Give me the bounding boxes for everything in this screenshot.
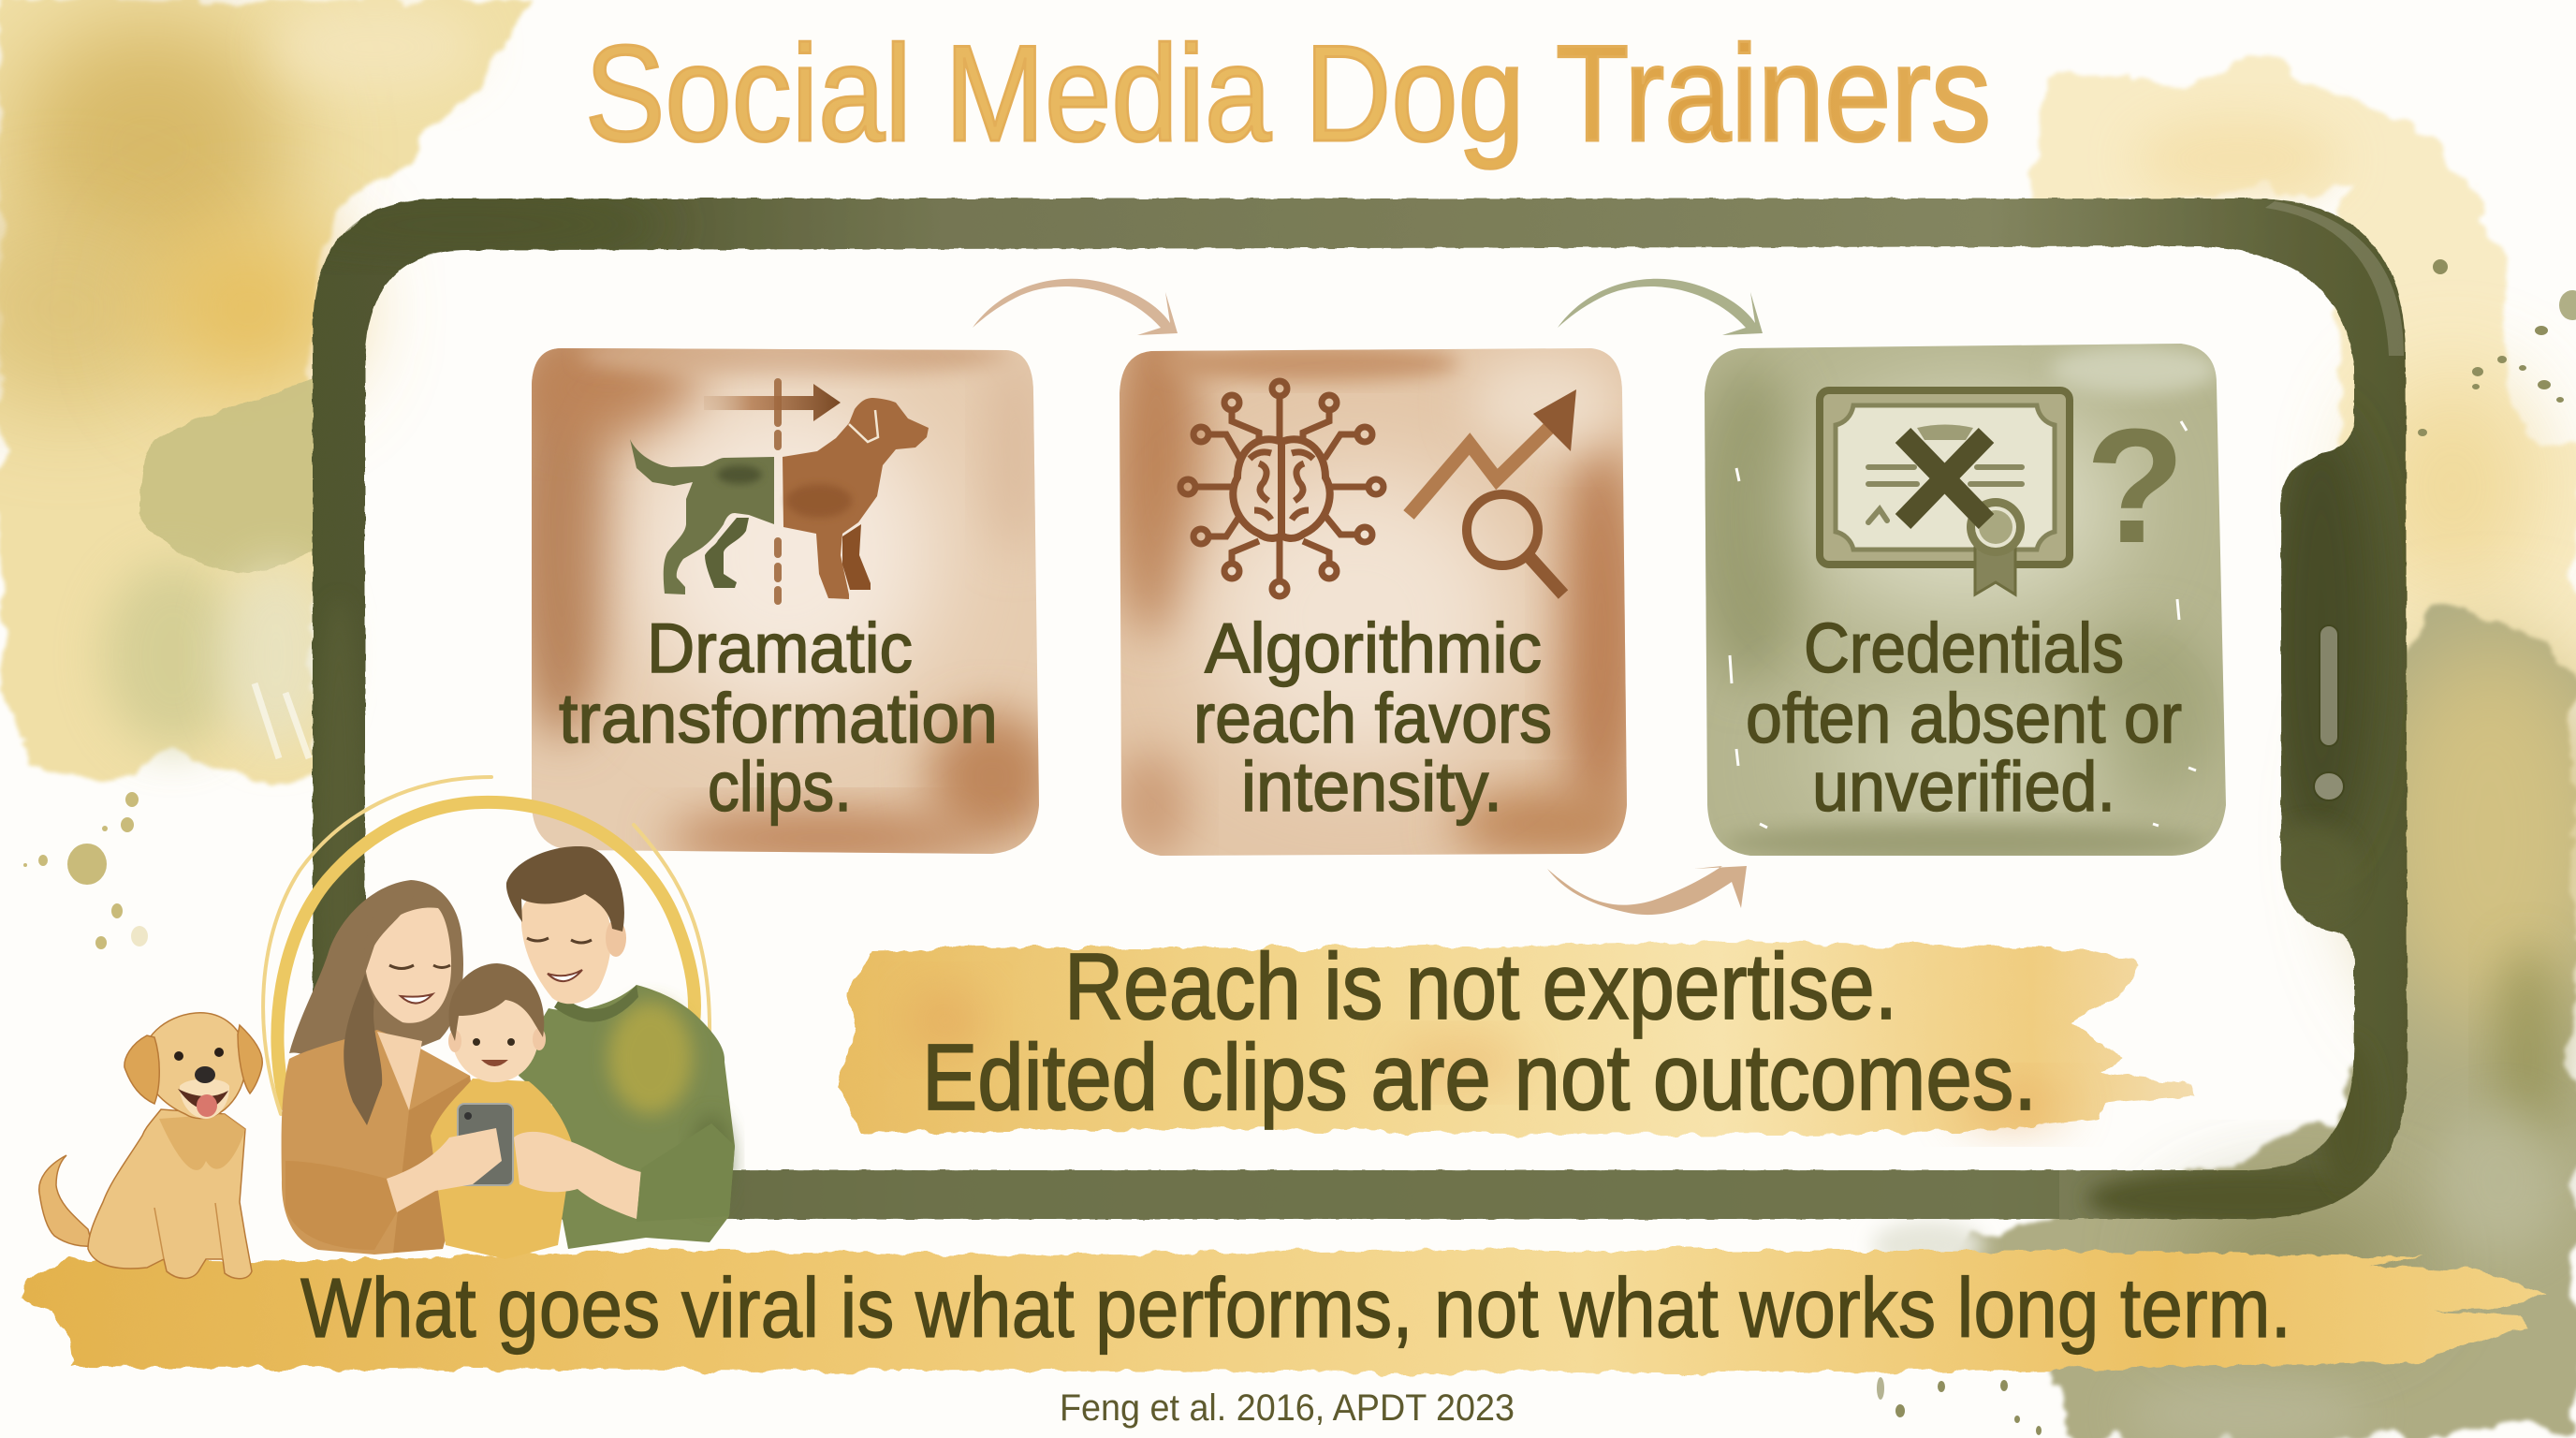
boy head bbox=[448, 963, 546, 1082]
card text: Credentials bbox=[1804, 609, 2124, 687]
icon: question mark: ? bbox=[2086, 394, 2185, 577]
panel: dramatic transformation clips bbox=[532, 348, 1039, 854]
title: Social Media Dog Trainers bbox=[585, 17, 1991, 169]
dog tail bbox=[39, 1155, 93, 1246]
icon: crossed out certificate bbox=[1820, 390, 2070, 594]
card text bbox=[1193, 609, 1552, 826]
callout: reach is not expertise: Edited clips are not outcomes. bbox=[922, 1025, 2037, 1130]
arrow: card two to card three bbox=[1558, 279, 1763, 335]
man torso bbox=[519, 985, 735, 1249]
watercolor wash: top right bbox=[2031, 56, 2576, 843]
card text: Dramatic bbox=[647, 609, 913, 687]
dog rear half bbox=[630, 439, 774, 594]
phone frame bbox=[262, 197, 2408, 1226]
icon: rising trend arrow bbox=[1409, 389, 1576, 515]
arrow: card one to card two bbox=[973, 279, 1178, 335]
phone home dot bbox=[2314, 772, 2344, 800]
icon: dashed midline bbox=[774, 382, 782, 601]
man sleeve cuff bbox=[637, 1123, 735, 1222]
dog front half bbox=[783, 398, 929, 599]
white paint flecks bbox=[1730, 421, 2196, 828]
watercolor wash: bottom right bbox=[1872, 609, 2576, 1438]
hair strand front bbox=[344, 974, 382, 1125]
watercolor wash: top left bbox=[0, 0, 534, 782]
phone side button bbox=[2320, 625, 2338, 746]
card text: transformation bbox=[559, 679, 998, 757]
dog body bbox=[88, 1109, 252, 1279]
family group with gold halo bbox=[39, 777, 735, 1279]
woman face bbox=[364, 882, 451, 1023]
callout: reach is not expertise bbox=[838, 934, 2195, 1135]
icon: circuit brain bbox=[1180, 381, 1383, 596]
icon: magnifying glass bbox=[1467, 494, 1563, 594]
hands bbox=[387, 1128, 641, 1219]
card text: often absent or bbox=[1746, 679, 2182, 757]
arrow: to reach banner bbox=[1547, 866, 1747, 915]
panel: algorithmic reach favors intensity bbox=[1120, 348, 1627, 856]
man head bbox=[506, 846, 626, 1004]
callout: reach is not expertise: Reach is not expertise. bbox=[1064, 934, 1897, 1039]
icon: arrow over dog bbox=[704, 384, 841, 421]
boy torso bbox=[431, 1078, 573, 1259]
golden retriever dog bbox=[39, 1013, 262, 1279]
woman hair back bbox=[289, 880, 463, 1125]
dog head bbox=[142, 1013, 246, 1119]
woman torso bbox=[282, 1030, 477, 1255]
panel: credentials often absent or unverified bbox=[1694, 337, 2237, 861]
card text: intensity. bbox=[1241, 747, 1502, 826]
card text bbox=[559, 609, 998, 826]
gold halo bbox=[263, 777, 710, 1114]
callout strip: what goes viral: What goes viral is what performs, not what works long term. bbox=[300, 1262, 2291, 1356]
card text: clips. bbox=[708, 747, 852, 826]
callout strip: what goes viral bbox=[19, 1250, 2546, 1373]
phone in hand bbox=[458, 1104, 513, 1185]
card text: reach favors bbox=[1193, 679, 1552, 757]
citation: Feng et al. 2016, APDT 2023 bbox=[1060, 1387, 1515, 1429]
icon: ribbon seal bbox=[1967, 498, 2025, 594]
card text: Algorithmic bbox=[1205, 609, 1542, 687]
icon: dog split before and after bbox=[630, 382, 929, 601]
card text: unverified. bbox=[1812, 747, 2115, 826]
card text bbox=[1746, 609, 2182, 826]
